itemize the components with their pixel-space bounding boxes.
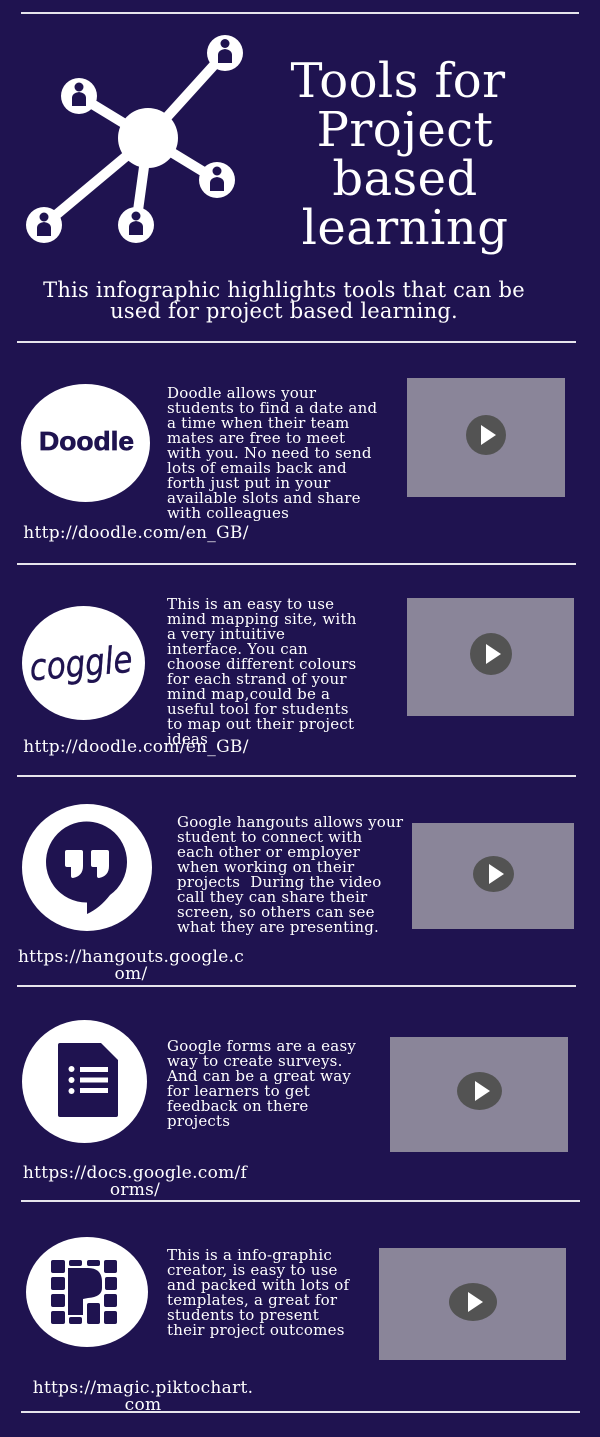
icon: play button xyxy=(457,1072,502,1110)
text: Piktochart description: students to present xyxy=(167,1306,319,1324)
subtitle xyxy=(43,278,525,323)
title: Tools for xyxy=(290,53,506,109)
text: Coggle description: a very intuitive xyxy=(167,625,285,643)
title: learning xyxy=(302,200,508,256)
title: Project xyxy=(317,102,493,158)
link: Hangouts URL xyxy=(18,947,244,984)
link: Forms URL: https://docs.google.com/f xyxy=(23,1163,247,1183)
text: Coggle description: mind mapping site, with xyxy=(167,610,357,628)
text: Coggle description: useful tool for students xyxy=(167,700,349,718)
icon: Coggle logo xyxy=(22,606,145,720)
text: Forms description: And can be a great way xyxy=(167,1067,351,1085)
text: Doodle description: lots of emails back and xyxy=(167,459,347,477)
link: Piktochart URL: com xyxy=(125,1395,161,1415)
text: Piktochart description: This is a info-graphic xyxy=(167,1246,332,1264)
text: Coggle description xyxy=(167,595,357,748)
text: Coggle description: to map out their project xyxy=(167,715,354,733)
text: Forms description xyxy=(166,1037,356,1130)
icon: Doodle logo xyxy=(21,384,150,502)
title: based xyxy=(332,151,478,207)
link: Piktochart URL xyxy=(33,1378,253,1415)
icon: Forms logo xyxy=(22,1020,147,1143)
text: Hangouts description: call they can share their xyxy=(177,888,367,906)
link: Hangouts URL: om/ xyxy=(115,964,147,984)
text: Doodle description xyxy=(167,384,377,522)
text: Forms description: Google forms are a easy xyxy=(167,1037,356,1055)
text: Doodle description: available slots and share xyxy=(167,489,361,507)
text: Hangouts description: when working on their xyxy=(177,858,354,876)
text: Coggle description: mind map,could be a xyxy=(167,685,330,703)
text: Hangouts description: Google hangouts allows your xyxy=(177,813,403,831)
text: Coggle description: ideas xyxy=(167,730,208,748)
text: Forms description: way to create surveys. xyxy=(167,1052,343,1070)
video: Forms xyxy=(390,1037,568,1152)
video: Piktochart xyxy=(379,1248,566,1360)
video: Doodle xyxy=(407,378,565,497)
icon: people network xyxy=(26,35,243,243)
text: Hangouts description: each other or employer xyxy=(177,843,360,861)
text: Hangouts description xyxy=(177,813,404,936)
text: Piktochart description: their project outcomes xyxy=(167,1321,345,1339)
icon: play button xyxy=(473,856,514,892)
text: Coggle description: choose different colours xyxy=(167,655,356,673)
panel: Google Hangouts xyxy=(18,804,574,984)
video: Hangouts xyxy=(412,823,574,929)
text: Hangouts description: student to connect with xyxy=(177,828,362,846)
icon: play button xyxy=(466,415,506,455)
icon: Piktochart logo xyxy=(26,1237,148,1347)
link: Hangouts URL: https://hangouts.google.c xyxy=(18,947,244,967)
video: Coggle xyxy=(407,598,574,716)
text: Coggle description: interface. You can xyxy=(167,640,308,658)
icon: play button xyxy=(449,1283,497,1321)
panel: Doodle xyxy=(21,378,565,543)
subtitle: This infographic highlights tools that can be xyxy=(43,278,525,302)
text: Forms description: projects xyxy=(167,1112,230,1130)
text: Doodle description: students to find a date and xyxy=(167,399,377,417)
text: Doodle description: mates are free to meet xyxy=(167,429,345,447)
title xyxy=(290,53,508,256)
text: Piktochart description: creator, is easy to use xyxy=(167,1261,338,1279)
link: Coggle URL: http://doodle.com/en_GB/ xyxy=(23,737,249,757)
text: Doodle description: with you. No need to send xyxy=(167,444,372,462)
text: Hangouts description: screen, so others can see xyxy=(177,903,375,921)
text: Coggle description: for each strand of your xyxy=(167,670,347,688)
text: Coggle description: This is an easy to use xyxy=(167,595,334,613)
text: Piktochart description: and packed with lots of xyxy=(167,1276,349,1294)
text: Doodle description: forth just put in your xyxy=(167,474,330,492)
icon: Hangouts logo xyxy=(22,804,152,931)
subtitle: used for project based learning. xyxy=(110,299,458,323)
text: Hangouts description: projects During the video xyxy=(177,873,382,891)
text: Hangouts description: what they are presenting. xyxy=(177,918,379,936)
link: Doodle URL: http://doodle.com/en_GB/ xyxy=(23,523,249,543)
text: Doodle description: Doodle allows your xyxy=(167,384,316,402)
text: Piktochart description: templates, a great for xyxy=(167,1291,337,1309)
panel: header xyxy=(26,35,525,323)
link: Piktochart URL: https://magic.piktochart. xyxy=(33,1378,253,1398)
icon: Doodle logo: Doodle xyxy=(39,426,134,456)
panel: Google Forms xyxy=(22,1020,568,1200)
text: Doodle description: with colleagues xyxy=(167,504,289,522)
link: Forms URL: orms/ xyxy=(110,1180,160,1200)
panel: Coggle xyxy=(22,595,574,757)
text: Forms description: for learners to get xyxy=(167,1082,310,1100)
text: Doodle description: a time when their team xyxy=(167,414,349,432)
panel: Piktochart xyxy=(26,1237,566,1415)
icon: play button xyxy=(470,633,512,675)
link: Forms URL xyxy=(23,1163,248,1200)
text: Forms description: feedback on there xyxy=(167,1097,309,1115)
text: Piktochart description xyxy=(167,1246,350,1339)
